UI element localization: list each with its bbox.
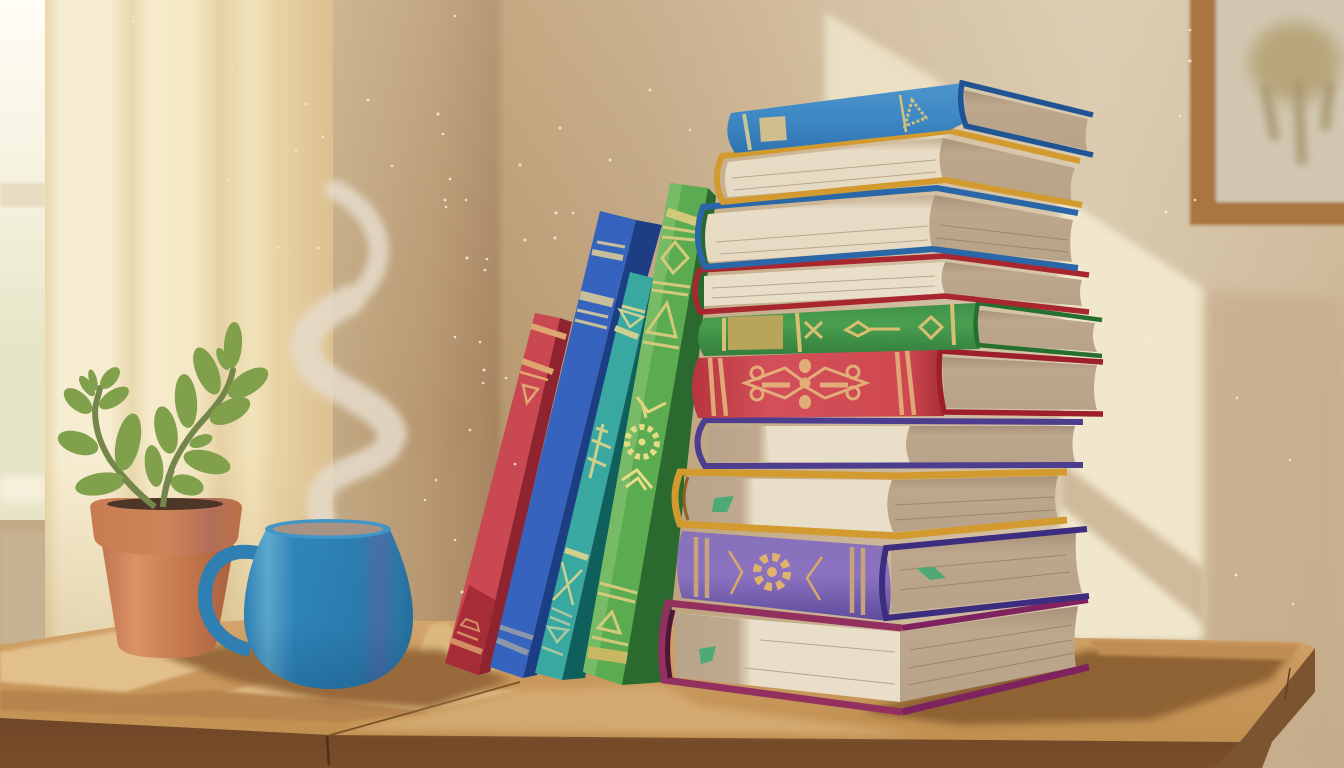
leaning blue book	[490, 211, 662, 678]
potted plant	[55, 321, 273, 658]
steam	[305, 190, 392, 518]
book 1 blue	[727, 83, 1093, 155]
curtain	[45, 0, 333, 645]
book 4 red	[695, 256, 1089, 312]
shadow under mug and pot	[160, 645, 510, 708]
book 10 magenta	[662, 600, 1089, 712]
book 5 green	[698, 303, 1102, 356]
dust particles	[132, 15, 1294, 605]
table	[0, 620, 1315, 768]
book 6 red	[692, 348, 1103, 418]
leaning green book	[583, 183, 716, 685]
picture frame	[1190, 0, 1344, 225]
mug handle	[205, 552, 262, 650]
window	[0, 0, 46, 650]
terracotta pot	[90, 470, 242, 658]
book 3 blue	[698, 188, 1078, 268]
leaning books	[445, 183, 716, 685]
mug body	[244, 530, 413, 689]
blue mug	[205, 519, 413, 689]
sunlight patches on wall	[825, 12, 1344, 768]
plant stems	[95, 370, 233, 507]
book 7 purple	[698, 420, 1083, 466]
book 8 yellow	[675, 472, 1067, 536]
book 2 yellow	[717, 131, 1082, 205]
horizontal book stack	[662, 83, 1103, 712]
plant leaves	[55, 321, 273, 499]
leaning red book	[445, 313, 572, 675]
leaning teal book	[535, 272, 668, 680]
book 9 purple	[677, 529, 1089, 621]
